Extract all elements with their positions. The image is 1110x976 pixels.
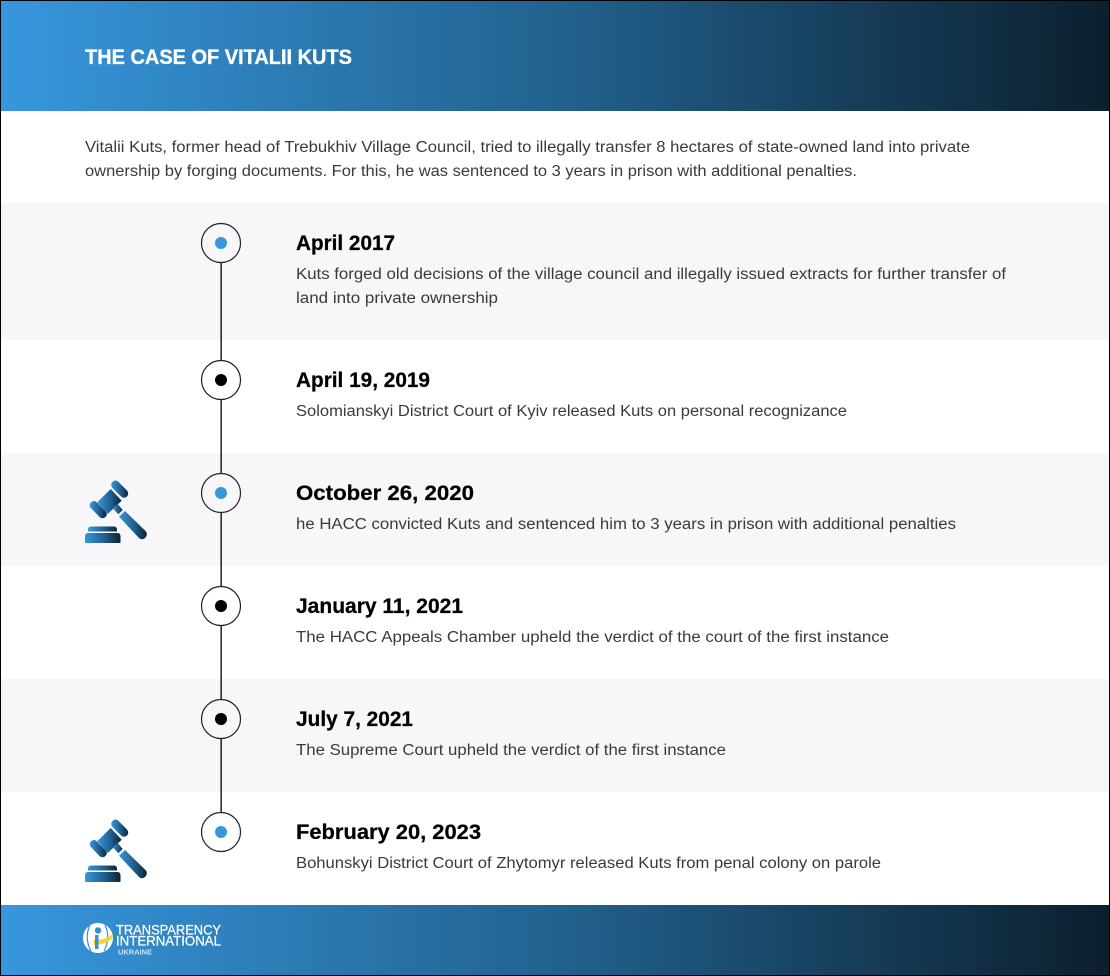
event: February 20, 2023: February 20, 2023 (296, 821, 481, 844)
timeline line (220, 243, 222, 832)
event: April 2017: land into private ownership (296, 290, 498, 307)
event: February 20, 2023: Bohunskyi District Court of Zhytomyr released Kuts from penal colony on parole (296, 855, 881, 872)
marker: July 7, 2021 (202, 700, 240, 738)
event: April 2017: April 2017 (296, 232, 395, 255)
marker: February 20, 2023 (202, 812, 240, 852)
logo: Transparency International Ukraine (83, 922, 222, 956)
header banner (0, 0, 1110, 111)
icon: gavel October 2020 (85, 480, 147, 543)
event: February 20, 2023 (296, 821, 881, 872)
event: October 26, 2020: he HACC convicted Kuts and sentenced him to 3 years in prison with additional penalties (296, 516, 956, 533)
event: April 2017 (296, 232, 1007, 307)
logo: Transparency International Ukraine: INTERNATIONAL (116, 932, 221, 948)
intro text (85, 139, 970, 180)
marker: April 19, 2019 (202, 360, 240, 400)
event: January 11, 2021 (296, 595, 889, 646)
icon: gavel February 2023 (85, 820, 147, 882)
event: January 11, 2021: January 11, 2021 (296, 595, 463, 618)
footer banner (0, 905, 1110, 976)
logo: Transparency International Ukraine: TRANSPARENCY (116, 922, 222, 938)
event: April 19, 2019 (296, 369, 847, 420)
intro text: ownership by forging documents. For this, he was sentenced to 3 years in prison with additional penalties. (85, 163, 857, 180)
logo: Transparency International Ukraine: UKRAINE (118, 948, 152, 956)
event: April 19, 2019: April 19, 2019 (296, 369, 430, 392)
marker: October 26, 2020 (202, 474, 240, 512)
title: THE CASE OF VITALII KUTS (85, 46, 352, 69)
marker: January 11, 2021 (202, 586, 240, 626)
event: July 7, 2021: July 7, 2021 (296, 708, 413, 731)
marker: April 2017 (202, 224, 240, 262)
intro text: Vitalii Kuts, former head of Trebukhiv Village Council, tried to illegally transfer 8 hectares of state-owned land into private (85, 139, 970, 156)
event: October 26, 2020: October 26, 2020 (296, 482, 474, 505)
row backgrounds (0, 203, 1110, 792)
event: April 2017: Kuts forged old decisions of the village council and illegally issued extracts for further transfer of (296, 266, 1007, 283)
event: January 11, 2021: The HACC Appeals Chamber upheld the verdict of the court of the first instance (296, 629, 889, 646)
event: July 7, 2021 (296, 708, 726, 759)
event: April 19, 2019: Solomianskyi District Court of Kyiv released Kuts on personal recognizance (296, 403, 847, 420)
event: July 7, 2021: The Supreme Court upheld the verdict of the first instance (296, 742, 726, 759)
event: October 26, 2020 (296, 482, 956, 533)
